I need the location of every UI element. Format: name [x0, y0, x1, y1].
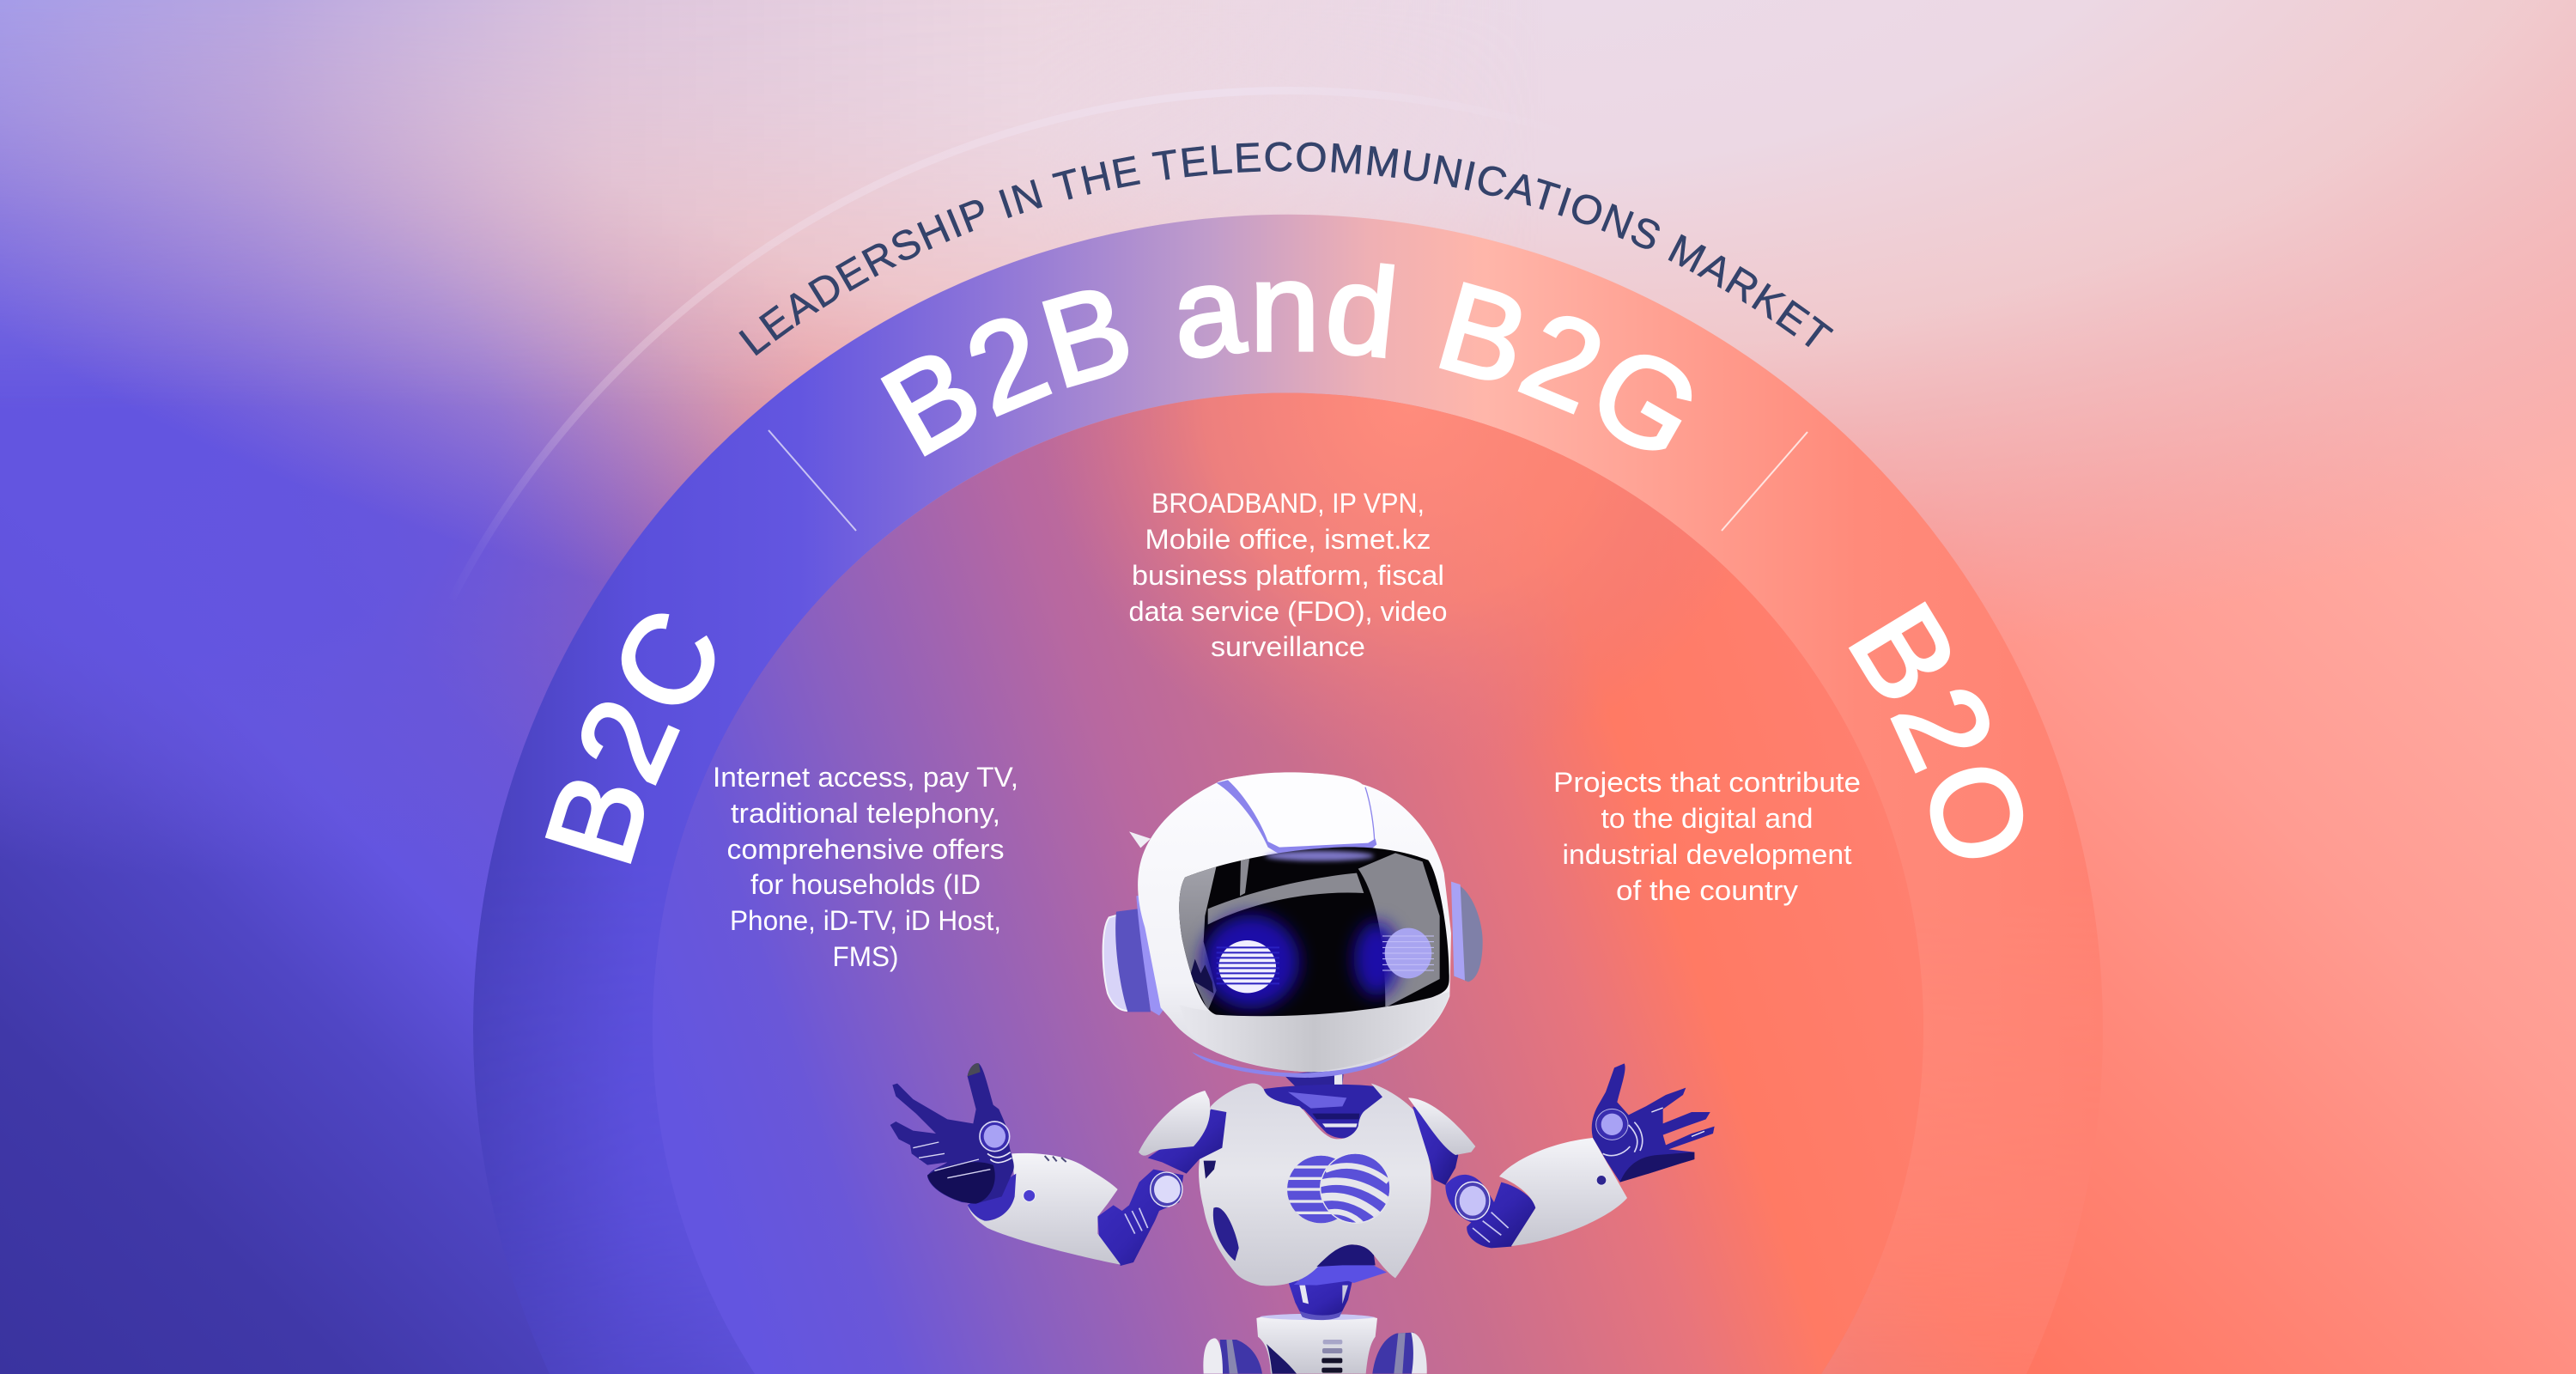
right ear	[1451, 882, 1483, 982]
heading B2O: B2O	[1848, 601, 2023, 859]
robot wheels	[1203, 1333, 1427, 1374]
text block B2C: FMS)	[833, 941, 898, 972]
visor	[1176, 847, 1449, 1016]
robot torso	[1199, 1083, 1431, 1286]
torso upper cutout	[1204, 1161, 1216, 1179]
helmet chin accent	[1192, 1052, 1400, 1078]
text block B2O: of the country	[1616, 875, 1798, 906]
text block B2B and B2G: surveillance	[1211, 631, 1365, 662]
left ear	[1103, 895, 1165, 1016]
robot illustration	[890, 772, 1715, 1374]
left elbow	[1097, 1170, 1183, 1266]
divider left	[769, 430, 856, 531]
text block B2B and B2G: BROADBAND, IP VPN,	[1151, 488, 1425, 519]
helmet chin band	[1179, 992, 1449, 1072]
heading B2B and B2G: B2B and B2G	[881, 263, 1692, 457]
text block B2C: comprehensive offers	[726, 834, 1005, 865]
right upper arm joint	[1413, 1106, 1458, 1185]
text block B2B and B2G: business platform, fiscal	[1132, 560, 1444, 591]
left forearm	[968, 1153, 1121, 1265]
robot logo	[1285, 1152, 1391, 1225]
left upper arm joint	[1148, 1110, 1226, 1174]
title curved: LEADERSHIP IN THE TELECOMMUNICATIONS MARKET	[738, 142, 1834, 356]
text block B2C: for households (ID	[750, 869, 981, 900]
thin decorative arc	[452, 91, 1560, 599]
robot hips	[1256, 1314, 1377, 1374]
robot right arm	[1408, 1063, 1715, 1248]
antenna	[1129, 831, 1151, 848]
text block B2O: industrial development	[1563, 839, 1852, 870]
left hand	[890, 1063, 1014, 1204]
helmet shell	[1138, 773, 1451, 1072]
heading B2C: B2C	[544, 613, 714, 864]
visor top glow	[1265, 851, 1374, 861]
inner disc	[653, 393, 1923, 1374]
text block B2C: Phone, iD-TV, iD Host,	[730, 905, 1001, 936]
torso side cutout	[1213, 1207, 1239, 1261]
text block B2C: Internet access, pay TV,	[713, 762, 1018, 793]
robot head	[1103, 772, 1483, 1078]
helmet top panel	[1217, 772, 1376, 856]
text block B2O: to the digital and	[1601, 803, 1814, 834]
divider right	[1722, 432, 1807, 531]
right forearm	[1499, 1138, 1627, 1246]
left shoulder shell	[1139, 1091, 1210, 1156]
ring band	[473, 215, 2103, 1374]
robot collar	[1264, 1085, 1384, 1138]
robot body	[1199, 1069, 1431, 1374]
robot pelvis plate	[1294, 1262, 1387, 1286]
text block B2O	[1553, 767, 1861, 906]
robot neck	[1284, 1069, 1344, 1091]
text block B2C	[713, 762, 1018, 972]
text block B2O: Projects that contribute	[1553, 767, 1861, 798]
text block B2B and B2G: Mobile office, ismet.kz	[1145, 524, 1431, 555]
text block B2B and B2G: data service (FDO), video	[1128, 596, 1448, 627]
torso lower dark opening	[1316, 1244, 1376, 1267]
robot left arm	[890, 1063, 1226, 1266]
robot waist	[1288, 1281, 1352, 1320]
text block B2C: traditional telephony,	[731, 798, 1000, 829]
right elbow	[1445, 1175, 1535, 1248]
right shoulder shell	[1408, 1097, 1475, 1155]
right hand	[1592, 1063, 1715, 1182]
text block B2B and B2G	[1128, 488, 1448, 662]
